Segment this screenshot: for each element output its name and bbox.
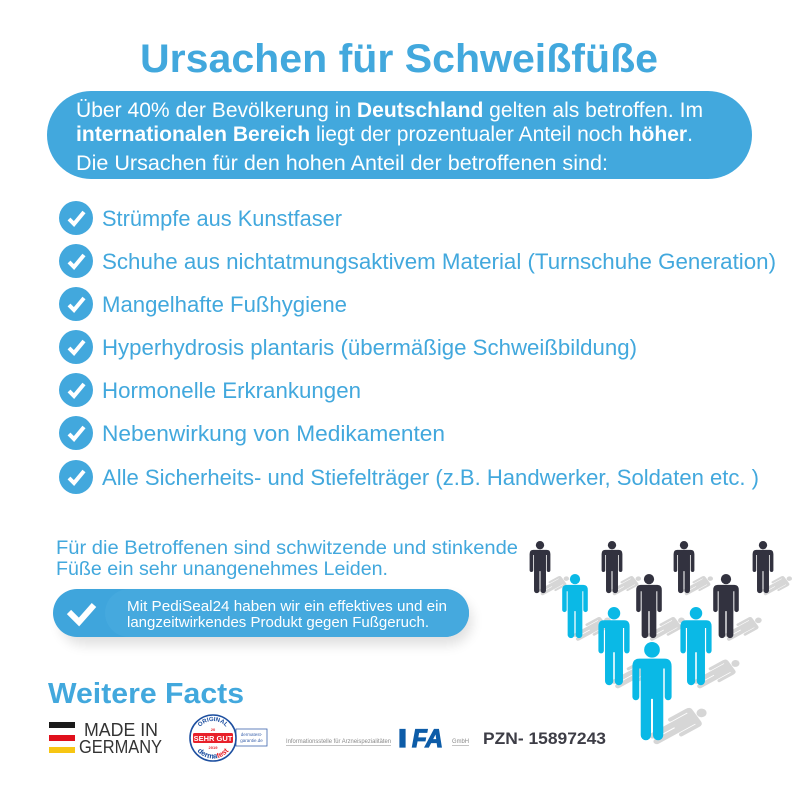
badge: dermatest seal: 2019 <box>209 745 218 750</box>
list item 2 <box>59 244 776 278</box>
logo: IFA: I <box>398 725 407 753</box>
intro text line 2: internationalen Bereich liegt der prozentualer Anteil noch höher. <box>76 123 693 146</box>
icon: check <box>69 605 94 622</box>
callout text: Mit PediSeal24 haben wir ein effektives und ein <box>127 598 447 615</box>
text block: suffering: Für die Betroffenen sind schwitzende und stinkende <box>56 538 518 559</box>
logo: IFA <box>286 725 469 753</box>
logo: made in Germany: MADE IN <box>84 720 158 740</box>
callout: product pill <box>53 589 472 645</box>
list item 6 <box>59 416 445 450</box>
list item 1: Strümpfe aus Kunstfaser <box>102 206 342 231</box>
list item 3 <box>59 287 347 321</box>
badge: dermatest seal: SEHR GUT <box>194 734 233 743</box>
title: Ursachen für Schweißfüße <box>140 37 658 81</box>
logo: IFA: FA <box>412 725 443 753</box>
list item 3: Mangelhafte Fußhygiene <box>102 292 347 317</box>
badge: dermatest seal: dermatest- <box>241 732 263 737</box>
callout text: langzeitwirkendes Produkt gegen Fußgeruch. <box>127 614 429 631</box>
logo: IFA: Informationsstelle für Arzneispezialitäten <box>286 738 391 745</box>
list item 4: Hyperhydrosis plantaris (übermäßige Schweißbildung) <box>102 335 637 360</box>
heading: Weitere Facts: Weitere Facts <box>48 678 244 710</box>
logo: made in Germany: GERMANY <box>79 737 162 757</box>
list: causes <box>59 201 776 494</box>
list item 6: Nebenwirkung von Medikamenten <box>102 421 445 446</box>
callout text <box>127 598 447 631</box>
list item 1 <box>59 201 342 235</box>
panel: intro banner <box>47 91 752 179</box>
product number: PZN- 15897243 <box>483 729 606 748</box>
list item 7: Alle Sicherheits- und Stiefelträger (z.B. Handwerker, Soldaten etc. ) <box>102 465 759 490</box>
text block: suffering <box>56 538 518 580</box>
intro text line 1: Über 40% der Bevölkerung in Deutschland gelten als betroffen. Im <box>76 99 703 122</box>
badge: dermatest seal: dermatest <box>198 748 229 759</box>
badge: dermatest seal <box>189 714 268 762</box>
illustration: people group <box>530 541 795 749</box>
list item 5 <box>59 373 361 407</box>
badge: dermatest seal: ORIGINAL <box>198 716 228 727</box>
logo: made in Germany <box>49 720 162 757</box>
intro text line 3: Die Ursachen für den hohen Anteil der betroffenen sind: <box>76 152 608 175</box>
list item 4 <box>59 330 637 364</box>
logo: IFA: GmbH <box>452 738 469 745</box>
list item 7 <box>59 460 759 494</box>
list item 5: Hormonelle Erkrankungen <box>102 378 361 403</box>
list item 2: Schuhe aus nichtatmungsaktivem Material (Turnschuhe Generation) <box>102 249 776 274</box>
text block: suffering: Füße ein sehr unangenehmes Leiden. <box>56 559 388 580</box>
badge: dermatest seal: 20 <box>211 727 216 732</box>
badge: dermatest seal: garantie.de <box>240 738 263 743</box>
